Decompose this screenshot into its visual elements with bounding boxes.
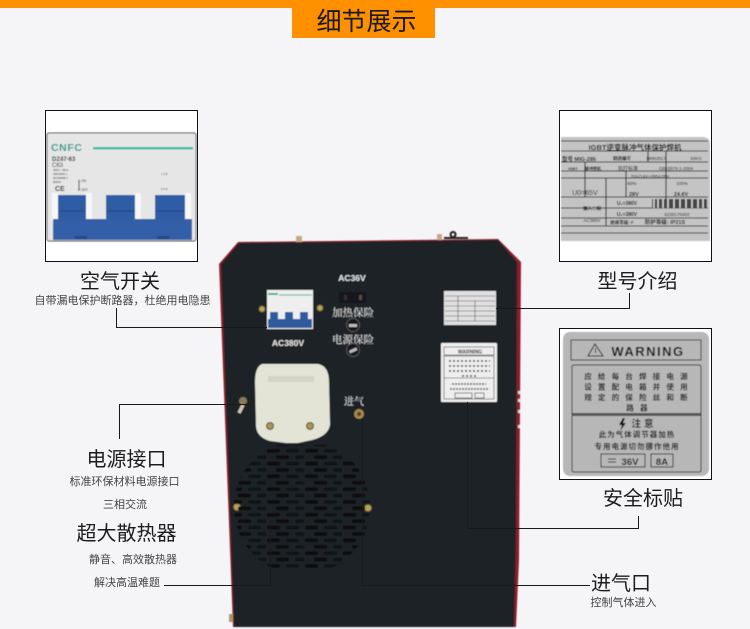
breaker specs: CE xyxy=(55,186,65,193)
breaker specs: 1 3 5 xyxy=(161,172,168,176)
mini warning plate xyxy=(441,343,497,402)
panel printed labels: AC36V xyxy=(338,273,366,283)
panel printed labels: 进气 xyxy=(344,393,364,408)
warning body: 专用电源切勿挪作他用 xyxy=(594,441,680,451)
plate text: 型号 MIG-285 xyxy=(562,155,596,163)
breaker specs: C63 xyxy=(52,163,64,169)
plate text xyxy=(562,142,702,226)
breaker specs: 0 OFF xyxy=(78,188,88,192)
plate text: IGBT xyxy=(568,166,578,171)
plate text: 18052517 xyxy=(646,156,667,161)
breaker brand: CNFC xyxy=(51,142,83,154)
rating boxes: 8A xyxy=(656,457,668,468)
title banner xyxy=(0,0,750,38)
plate text: 绝缘等级: F xyxy=(610,219,634,226)
heading: power connector: 电源接口 xyxy=(86,448,166,471)
rating boxes xyxy=(601,454,673,468)
plate text: U0=65V xyxy=(572,190,598,197)
panel body with red edge xyxy=(219,239,521,627)
title banner: 细节展示 xyxy=(316,8,417,36)
panel: warning label photo xyxy=(560,328,712,480)
warning body: 应给每台焊接电源 xyxy=(584,371,694,381)
breaker body xyxy=(47,133,196,241)
mini model plate xyxy=(444,291,496,325)
warning body xyxy=(572,365,701,472)
bottom left nipple xyxy=(229,614,233,622)
label body xyxy=(563,332,709,476)
plate text: 6220170402 xyxy=(664,212,690,217)
rating boxes: 36V xyxy=(622,457,639,468)
heading: heatsink: 超大散热器 xyxy=(76,522,176,545)
heading: model: 型号介绍 xyxy=(598,270,678,293)
mini warning plate: WARNING xyxy=(458,350,482,356)
panel printed labels: 加热保险 xyxy=(332,305,374,320)
caption: heatsink line 1: 静音、高效散热器 xyxy=(89,552,177,566)
gas inlet fitting xyxy=(354,409,364,419)
warning body: 此为气体调节器加热 xyxy=(599,429,675,439)
breaker specs: 400V~ 50Hz xyxy=(53,168,69,172)
toggle and fuses xyxy=(339,292,366,356)
plate text: GB15579.1-2004 xyxy=(659,166,694,171)
warning body: 路器 xyxy=(626,402,654,412)
plate grid xyxy=(561,141,708,233)
plate text: IGBT逆变脉冲气体保护焊机 xyxy=(589,142,682,152)
warning body: 规定的保险丝和断 xyxy=(584,392,694,402)
leader line: power connector xyxy=(120,404,250,439)
warning header: WARNING xyxy=(611,344,685,359)
plate body xyxy=(561,137,710,241)
mini breaker xyxy=(267,290,313,329)
heading: gas inlet: 进气口 xyxy=(591,572,651,595)
warning header xyxy=(571,340,701,360)
leader line: safety label xyxy=(468,402,638,528)
leader line: air switch xyxy=(116,308,267,328)
caption: air switch: 自带漏电保护断路器，杜绝用电隐患 xyxy=(34,293,210,307)
plate text: 制造编号 xyxy=(613,155,631,162)
warning body: 设置配电箱并使用 xyxy=(584,382,694,392)
plate text: 28KG xyxy=(690,156,702,161)
heading: air switch: 空气开关 xyxy=(80,270,160,293)
panel printed labels: AC380V xyxy=(272,338,304,348)
leader line: heatsink xyxy=(164,520,270,586)
caption: power connector line 2: 三相交流 xyxy=(103,497,147,511)
leader line: gas inlet xyxy=(362,419,590,586)
breaker specs: 2 4 6 xyxy=(161,187,168,191)
power socket xyxy=(255,364,330,443)
breaker specs: 1 ON xyxy=(78,179,87,183)
panel screws xyxy=(234,305,372,512)
fan grille xyxy=(230,445,375,570)
panel: air switch photo xyxy=(46,110,198,262)
plate text: AC380V xyxy=(584,218,600,223)
machine rear panel xyxy=(219,232,521,627)
plate text: U₁=380V xyxy=(617,201,638,207)
ground lug xyxy=(239,397,247,413)
plate text: 20A/14V~285A28V xyxy=(631,174,669,179)
top fittings xyxy=(296,232,468,242)
caption: gas inlet: 控制气体进入 xyxy=(590,595,656,609)
breaker specs: 6000A xyxy=(53,180,61,184)
caption: heatsink line 2: 解决高温难题 xyxy=(94,575,160,589)
panel printed labels: 电源保险 xyxy=(332,332,374,347)
heading: safety label: 安全标贴 xyxy=(603,487,683,510)
leader line: model plate xyxy=(496,293,630,308)
right edge dots xyxy=(518,391,520,428)
breaker specs: DZ47-63 xyxy=(52,157,76,163)
plate text: U₁=380V xyxy=(617,212,638,218)
breaker levers xyxy=(52,193,192,240)
plate text: 防护等级: IP21S xyxy=(645,218,686,226)
plate text: 100% xyxy=(676,181,688,186)
panel: model plate photo xyxy=(560,110,712,262)
plate text: 60% xyxy=(627,181,637,186)
plate text: 脉冲焊机 xyxy=(585,165,601,171)
warning body: 注意 xyxy=(631,418,657,430)
barcode xyxy=(652,199,707,208)
breaker specs: GB10963.1 xyxy=(53,172,68,176)
plate text: 24.6V xyxy=(674,192,689,198)
caption: power connector line 1: 标准环保材料电源接口 xyxy=(70,474,180,488)
breaker specs xyxy=(52,157,168,193)
panel printed labels xyxy=(272,273,374,408)
breaker specs: IEC60898-1 xyxy=(53,176,68,180)
plate text: 抗拧标准 xyxy=(618,165,638,172)
plate text: 28V xyxy=(629,192,639,198)
plate text: 输入三相 xyxy=(583,205,601,212)
